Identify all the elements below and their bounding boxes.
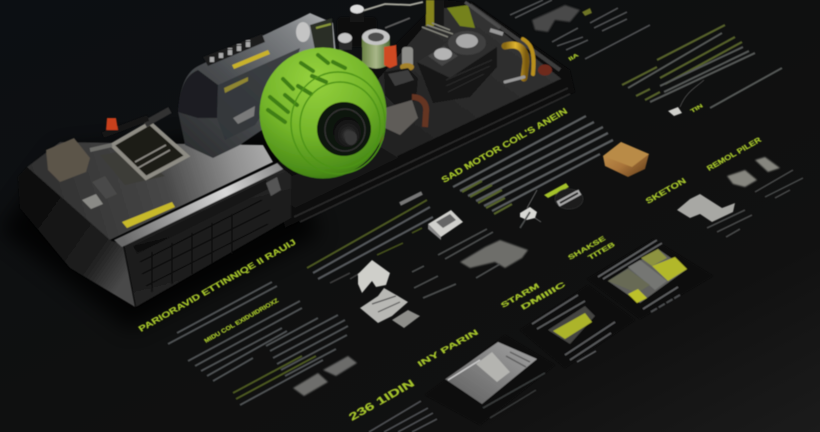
orange knob <box>106 118 118 130</box>
icon: gray scrap part <box>460 240 528 268</box>
hub <box>317 102 371 156</box>
gold pipe <box>505 39 534 82</box>
panel: top text block: IIA <box>568 53 580 62</box>
green wheel <box>260 48 386 178</box>
text lines beside scrap <box>412 212 530 298</box>
left gray block <box>46 138 90 182</box>
icon: small white box with wire <box>520 190 541 222</box>
panel: shakse titeb chart: TITEB <box>586 240 616 261</box>
heading: REMOL PILER <box>705 136 763 173</box>
panel background <box>520 285 635 368</box>
text lines <box>598 240 678 309</box>
top rail and yellow post <box>362 0 503 37</box>
heading: SKETON <box>644 177 688 206</box>
valve body and brown pipe <box>374 68 426 143</box>
photo <box>445 342 537 404</box>
control module with silver domes <box>417 31 497 103</box>
text lines <box>532 295 615 362</box>
yellow label strip <box>232 50 270 69</box>
text lines <box>168 282 348 405</box>
panel: upper right text block <box>622 25 782 116</box>
display with digits <box>203 34 265 66</box>
chart <box>608 249 687 303</box>
panel: starm dmiiic: DMIIIIC <box>519 280 568 312</box>
text lines <box>707 210 752 237</box>
sub-heading: MIDU COL EXIDUIDRIOXZ <box>203 297 280 344</box>
motor housing <box>178 13 336 158</box>
text lines <box>369 401 437 432</box>
heading: INY PARIN <box>416 328 480 369</box>
text lines <box>483 373 545 418</box>
icon: copper block <box>603 142 649 177</box>
text lines <box>307 200 427 268</box>
heading: 236 1IDIN <box>346 377 417 423</box>
panel background <box>587 239 713 319</box>
callout: green tag and striped disc <box>544 183 583 209</box>
right component platform <box>264 0 575 228</box>
red disc <box>538 64 552 76</box>
control labels <box>82 194 103 209</box>
text lines <box>453 116 613 211</box>
label: TIN <box>690 103 704 114</box>
panel: 236 lidin <box>346 377 437 432</box>
panel: starm dmiiic <box>499 280 635 368</box>
grille <box>135 184 270 292</box>
heading: STARM <box>499 282 541 310</box>
panel background <box>425 335 555 425</box>
mechanism frame <box>90 110 187 185</box>
panel: motor coil text block <box>440 107 613 214</box>
heading: PARIORAVID ETTINNIQE II RAUIJ <box>137 238 298 334</box>
gray photo blobs <box>293 356 357 396</box>
icon: small white part <box>668 107 682 116</box>
panel: skeleton section <box>644 177 752 237</box>
yellow warning label <box>122 202 175 228</box>
heading: SAD MOTOR COIL'S ANEIN <box>440 107 569 185</box>
panel: iny parin <box>416 328 555 425</box>
white blocks <box>677 194 735 222</box>
tread slots <box>268 55 345 122</box>
heading: SHAKSE <box>566 234 607 261</box>
part sketches <box>727 157 780 187</box>
machine illustration <box>18 0 575 307</box>
panel: remol piler section <box>705 136 803 198</box>
yellow screen <box>548 306 595 344</box>
panel: central text block <box>307 193 433 283</box>
panel: top text block <box>510 0 650 62</box>
wheel face rings <box>291 72 385 174</box>
small caps and cylinders <box>337 4 414 71</box>
base battery box <box>18 142 291 307</box>
text lines <box>755 170 803 198</box>
panel: upper left text block <box>137 238 348 405</box>
faint heading <box>400 193 422 204</box>
icon: white stacked blocks <box>358 260 420 328</box>
panel: shakse titeb chart <box>566 234 713 319</box>
icon: white device <box>428 210 463 240</box>
